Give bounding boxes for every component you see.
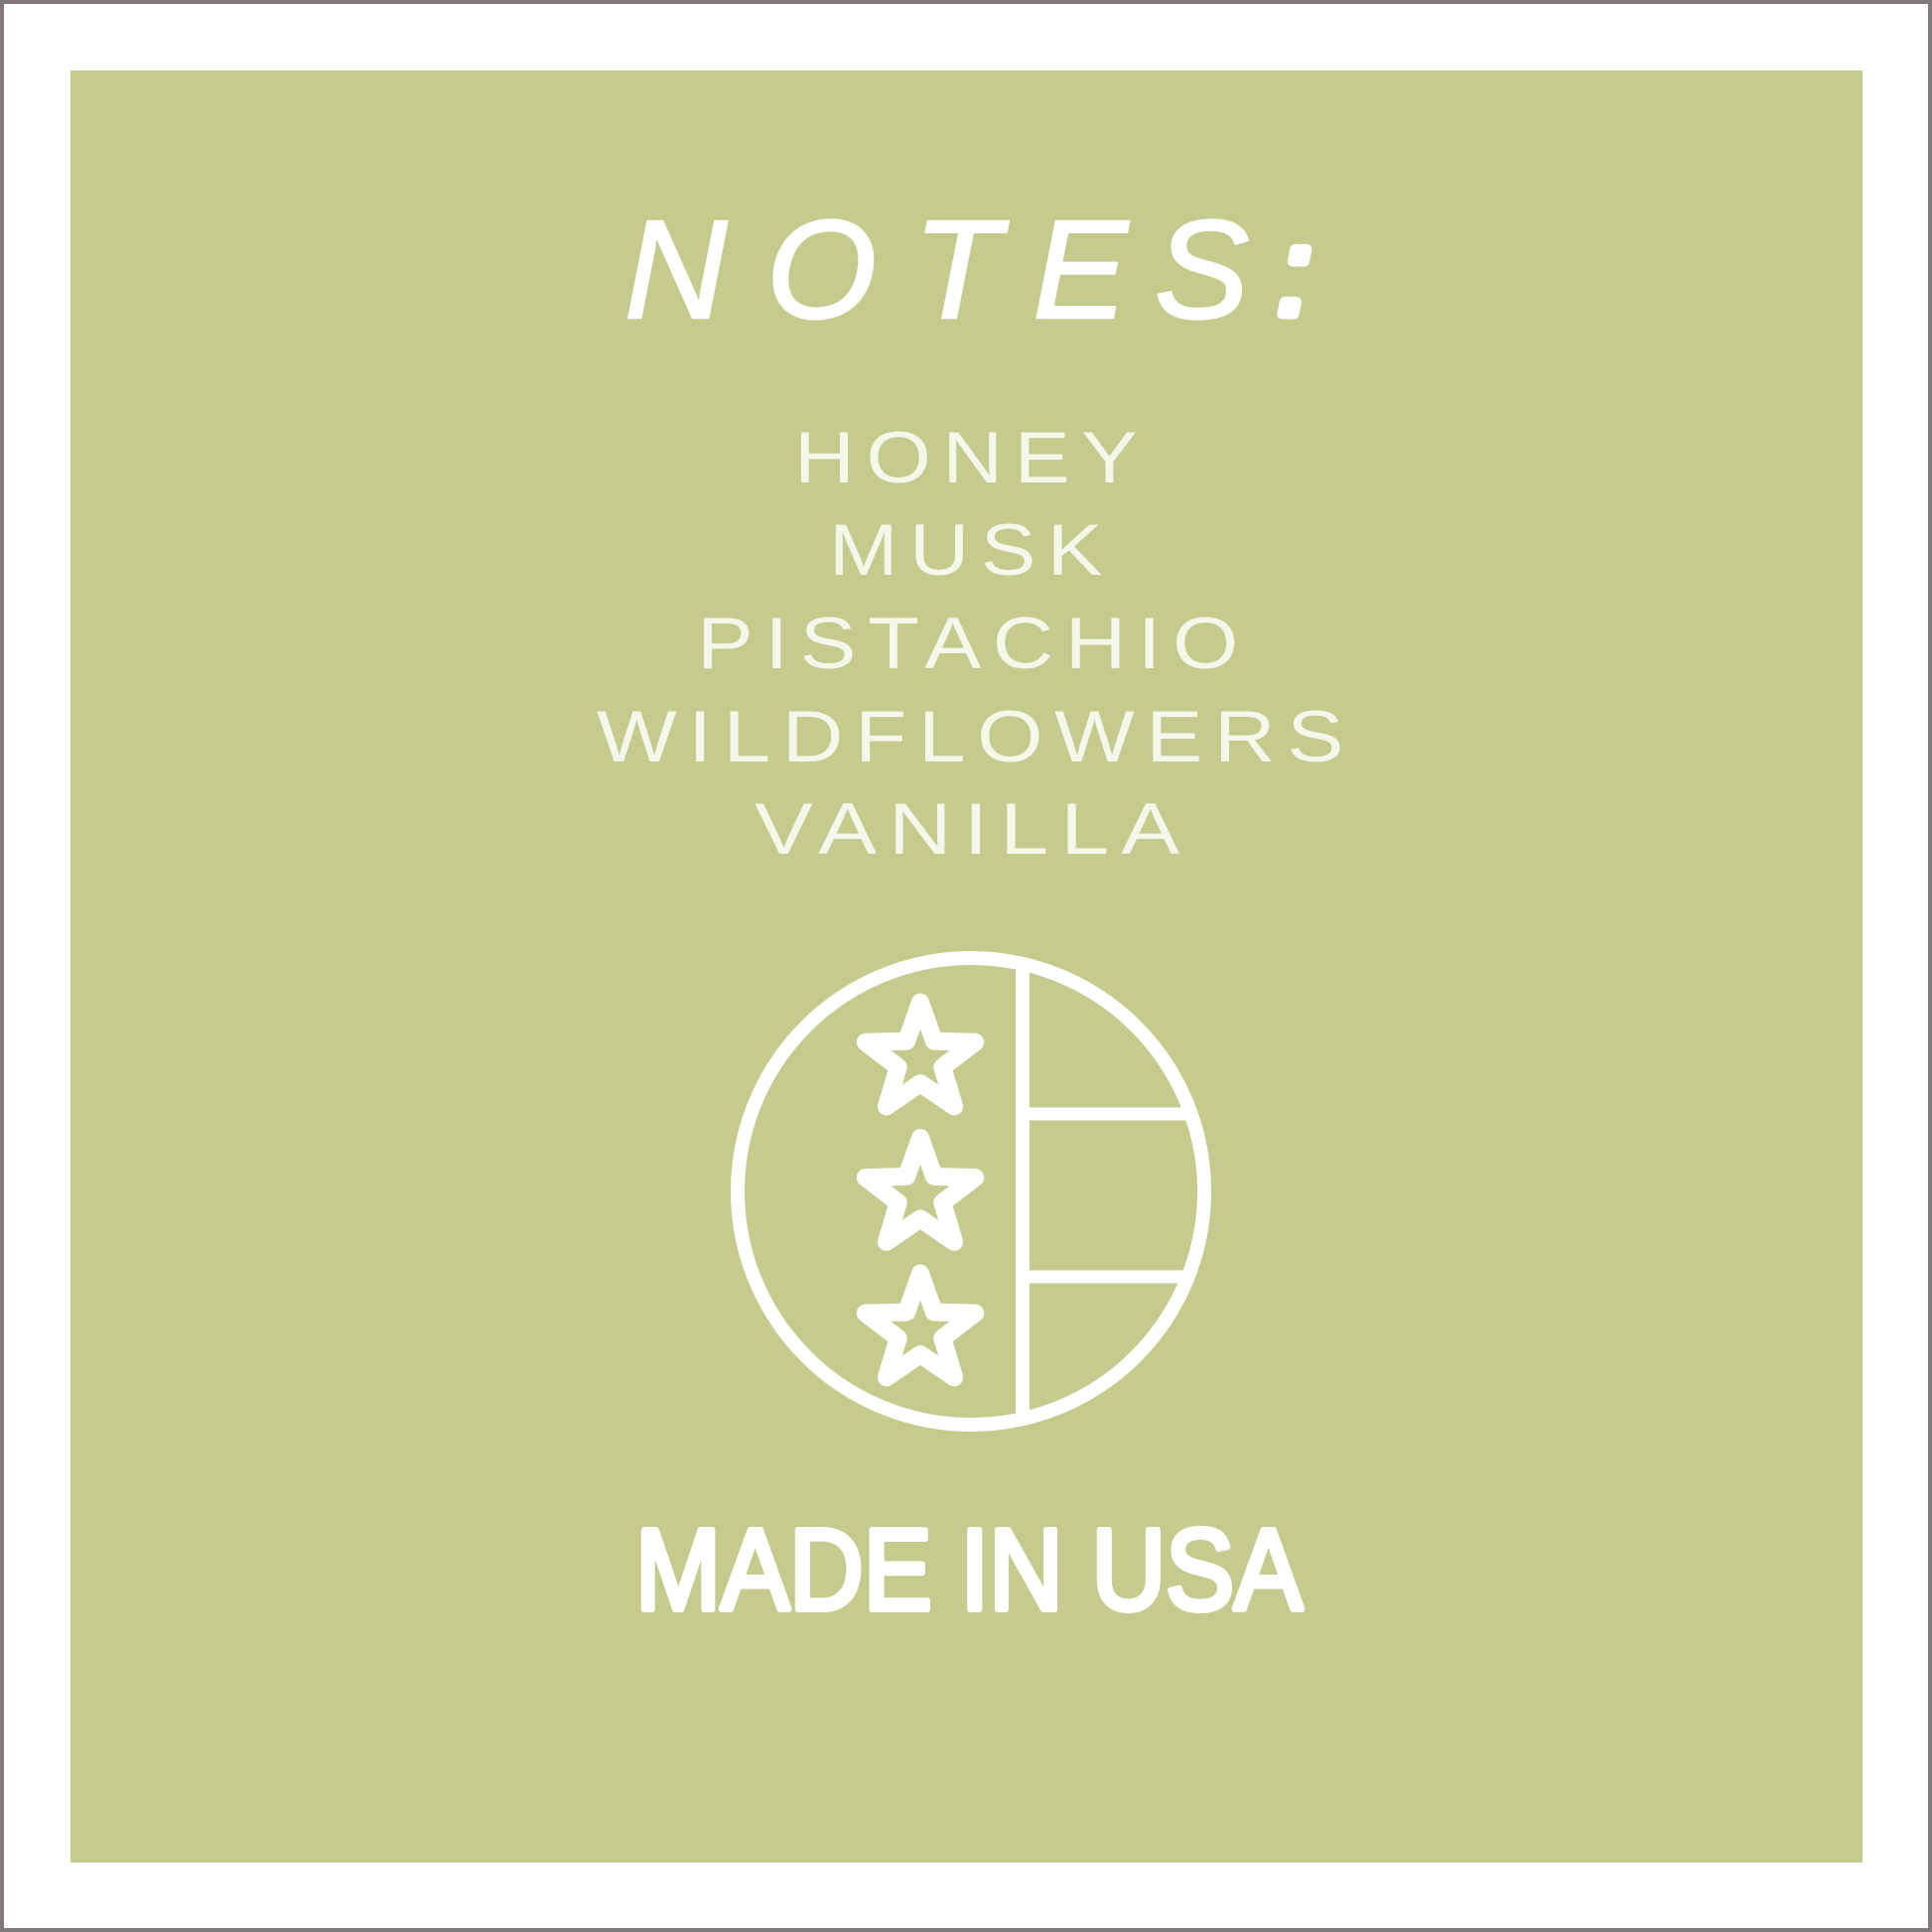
icon: circle outline bbox=[738, 958, 1204, 1425]
icon: USA flag globe bbox=[738, 958, 1204, 1425]
icon: flag upper stripe line bbox=[1023, 1108, 1189, 1120]
icon: star two bbox=[866, 1138, 975, 1242]
note: vanilla: VANILLA bbox=[755, 789, 1191, 870]
list of fragrance notes bbox=[597, 418, 1355, 870]
icon: star three bbox=[866, 1274, 975, 1378]
caption: made in USA: MADE IN USA bbox=[635, 1505, 1304, 1634]
note: honey: HONEY bbox=[794, 418, 1149, 498]
note: pistachio: PISTACHIO bbox=[697, 604, 1250, 684]
icon: star one bbox=[866, 1003, 975, 1106]
note: wildflowers: WILDFLOWERS bbox=[597, 697, 1355, 777]
note: musk: MUSK bbox=[829, 510, 1114, 591]
icon: flag vertical divider bbox=[1016, 964, 1030, 1419]
title: NOTES: NOTES bbox=[624, 193, 1249, 348]
title: NOTES: : bbox=[1278, 204, 1311, 341]
icon: flag lower stripe line bbox=[1023, 1271, 1189, 1283]
